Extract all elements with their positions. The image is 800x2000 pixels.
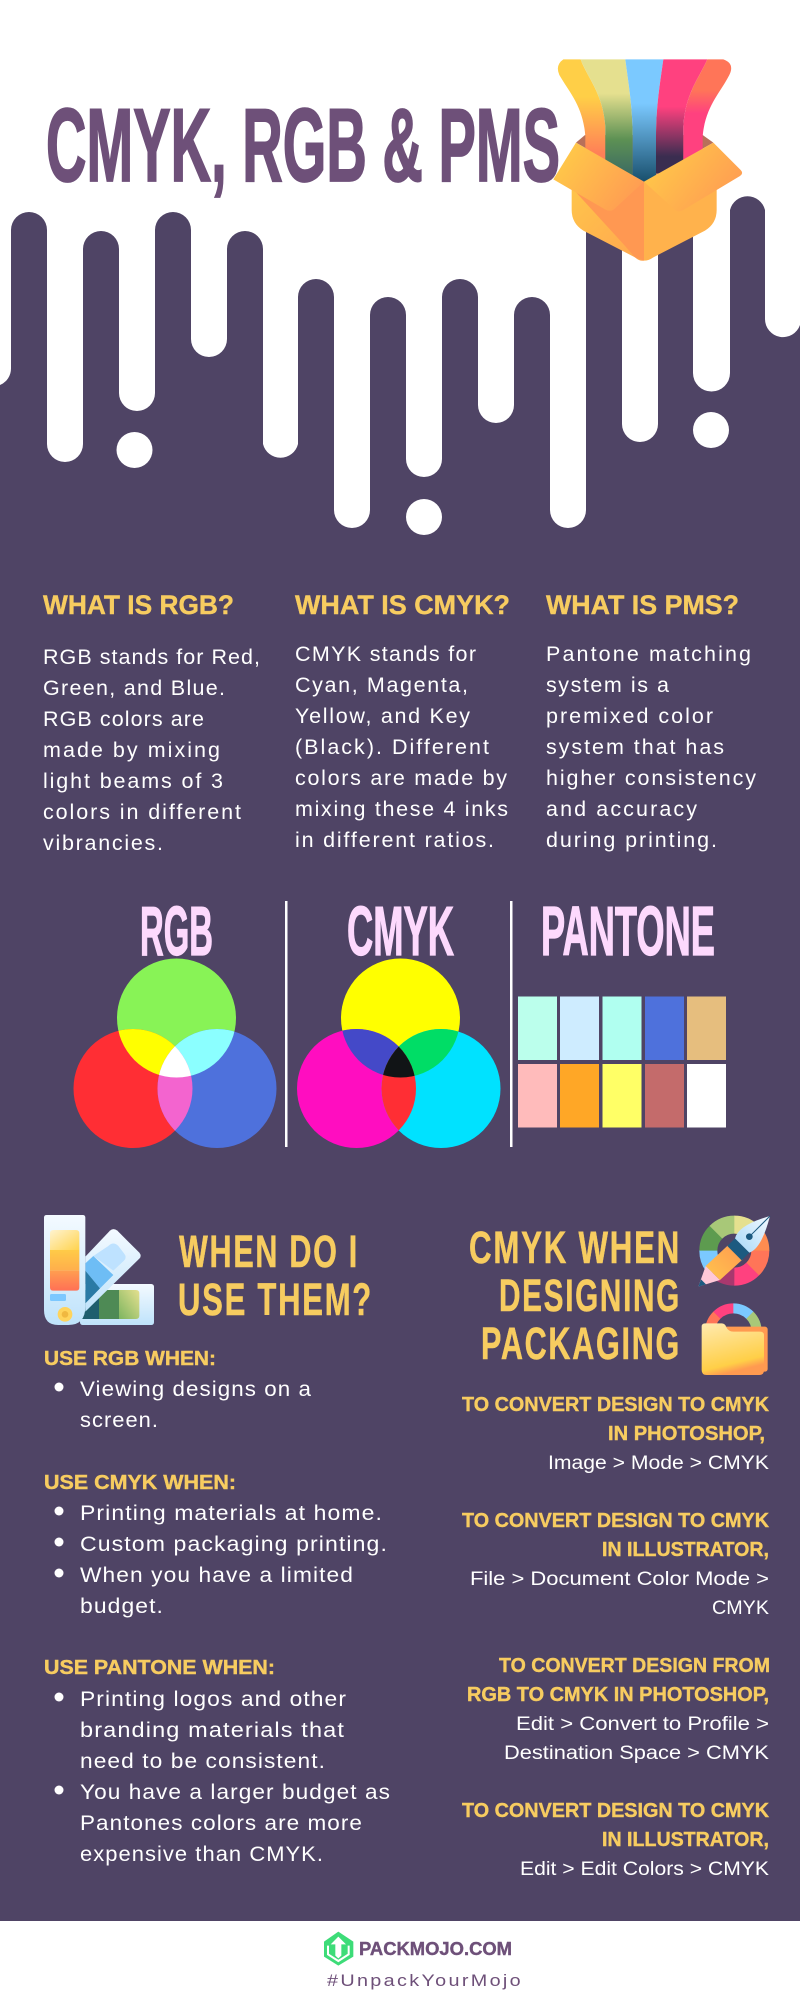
text block: convert from RGB in Photoshop xyxy=(467,1655,770,1764)
text block: convert from RGB in Photoshop: Edit > Convert to Profile > xyxy=(516,1714,769,1735)
heading: when do I use them xyxy=(178,1226,373,1325)
heading: CMYK when designing packaging xyxy=(469,1222,681,1369)
footer hashtag: #UnpackYourMojo xyxy=(327,1971,523,1990)
divider right xyxy=(510,901,512,1147)
text block: convert from RGB in Photoshop: RGB TO CMYK IN PHOTOSHOP, xyxy=(467,1684,769,1706)
icon: open box with colour ribbons xyxy=(553,59,742,261)
text block: convert in Illustrator: IN ILLUSTRATOR, xyxy=(602,1539,769,1561)
icon: folder with colour arc xyxy=(700,1299,768,1375)
panel: RGB colour diagram: RGB xyxy=(140,892,213,970)
bullet list: Pantone uses: Printing logos and other xyxy=(80,1688,347,1711)
panel: what is RGB xyxy=(43,590,260,855)
bullet list: Pantone uses: expensive than CMYK. xyxy=(80,1843,324,1866)
heading: what is RGB: WHAT IS RGB? xyxy=(43,590,234,620)
icon: swatch fan xyxy=(44,1215,154,1325)
text block: CMYK definition: mixing these 4 inks xyxy=(295,797,508,821)
text block: PMS definition: higher consistency xyxy=(546,766,756,790)
text block: convert from RGB in Photoshop: Destination Space > CMYK xyxy=(504,1743,769,1764)
subheading: use RGB when: USE RGB WHEN: xyxy=(44,1347,216,1370)
divider left xyxy=(285,901,288,1147)
panel: what is PMS xyxy=(546,590,756,852)
heading: what is CMYK: WHAT IS CMYK? xyxy=(295,590,510,620)
text block: convert in Photoshop: Image > Mode > CMYK xyxy=(548,1453,769,1474)
text block: PMS definition: system is a xyxy=(546,673,669,697)
bullet list: CMYK uses: Custom packaging printing. xyxy=(80,1533,388,1556)
subheading: use Pantone when: USE PANTONE WHEN: xyxy=(44,1656,275,1679)
text block: convert in Photoshop: IN PHOTOSHOP, xyxy=(608,1423,765,1445)
chart: subtractive CMYK circles xyxy=(297,958,500,1148)
bullet list: CMYK uses: Printing materials at home. xyxy=(80,1502,383,1525)
bullet list: RGB uses xyxy=(54,1378,312,1432)
heading: CMYK when designing packaging: CMYK WHEN xyxy=(469,1222,681,1273)
heading: what is PMS: WHAT IS PMS? xyxy=(546,590,739,620)
heading: CMYK when designing packaging: PACKAGING xyxy=(481,1318,681,1369)
text block: edit colours in Illustrator: TO CONVERT DESIGN TO CMYK xyxy=(462,1800,770,1822)
icon: Packmojo logo xyxy=(324,1932,353,1966)
text block: RGB definition: RGB stands for Red, xyxy=(43,645,260,669)
text block: RGB definition: Green, and Blue. xyxy=(43,676,225,700)
text block: use Pantone when xyxy=(44,1656,391,1866)
text block: convert in Photoshop: TO CONVERT DESIGN TO CMYK xyxy=(462,1394,770,1416)
text block: edit colours in Illustrator: Edit > Edit Colors > CMYK xyxy=(520,1859,769,1880)
text block: PMS definition: system that has xyxy=(546,735,724,759)
text block: CMYK definition: (Black). Different xyxy=(295,735,489,759)
text block: RGB definition: vibrancies. xyxy=(43,831,163,855)
text block: edit colours in Illustrator xyxy=(462,1800,770,1880)
text block: convert in Illustrator xyxy=(462,1510,770,1619)
bullet list: Pantone uses: branding materials that xyxy=(80,1719,345,1742)
text block: convert in Illustrator: TO CONVERT DESIGN TO CMYK xyxy=(462,1510,770,1532)
subheading: use CMYK when: USE CMYK WHEN: xyxy=(44,1471,236,1494)
chart: additive RGB circles xyxy=(74,958,276,1148)
bullet list: RGB uses: screen. xyxy=(80,1409,159,1432)
bullet list: CMYK uses: When you have a limited xyxy=(80,1564,354,1587)
text block: use RGB when xyxy=(44,1347,312,1432)
text block: RGB definition: RGB colors are xyxy=(43,707,204,731)
text block: convert in Illustrator: CMYK xyxy=(712,1598,769,1619)
footer brand name: PACKMOJO.COM xyxy=(359,1939,512,1959)
text block: CMYK definition xyxy=(295,642,508,852)
text block: use CMYK when xyxy=(44,1471,388,1618)
text block: RGB definition: made by mixing xyxy=(43,738,220,762)
text block: CMYK definition: colors are made by xyxy=(295,766,507,790)
panel: what is CMYK xyxy=(295,590,510,852)
text block: RGB definition: colors in different xyxy=(43,800,241,824)
bullet list: CMYK uses xyxy=(54,1502,388,1618)
text block: PMS definition: premixed color xyxy=(546,704,713,728)
text block: convert in Photoshop xyxy=(462,1394,770,1474)
text block: CMYK definition: CMYK stands for xyxy=(295,642,476,666)
heading: when do I use them: WHEN DO I xyxy=(179,1226,359,1277)
bullet list: Pantone uses: need to be consistent. xyxy=(80,1750,326,1773)
text block: RGB definition xyxy=(43,645,260,855)
text block: PMS definition: Pantone matching xyxy=(546,642,751,666)
text block: CMYK definition: in different ratios. xyxy=(295,828,494,852)
text block: RGB definition: light beams of 3 xyxy=(43,769,223,793)
text block: convert in Illustrator: File > Document Color Mode > xyxy=(470,1569,769,1590)
text block: PMS definition xyxy=(546,642,756,852)
text block: PMS definition: during printing. xyxy=(546,828,717,852)
bullet list: RGB uses: Viewing designs on a xyxy=(80,1378,312,1401)
bullet list: CMYK uses: budget. xyxy=(80,1595,164,1618)
bullet list: Pantone uses: Pantones colors are more xyxy=(80,1812,363,1835)
icon: pen over colour wheel xyxy=(698,1214,771,1287)
label: CMYK: CMYK xyxy=(347,892,454,970)
chart: Pantone swatch grid xyxy=(518,996,726,1128)
text block: edit colours in Illustrator: IN ILLUSTRATOR, xyxy=(602,1829,769,1851)
text block: PMS definition: and accuracy xyxy=(546,797,697,821)
panel: RGB colour diagram xyxy=(74,892,276,1148)
panel: CMYK colour diagram xyxy=(297,892,500,1148)
bullet list: Pantone uses: You have a larger budget as xyxy=(80,1781,391,1804)
heading: CMYK when designing packaging: DESIGNING xyxy=(499,1270,681,1321)
heading: when do I use them: USE THEM? xyxy=(178,1274,373,1325)
text block: convert from RGB in Photoshop: TO CONVERT DESIGN FROM xyxy=(499,1655,770,1677)
panel: Pantone swatches xyxy=(518,892,726,1128)
bullet list: Pantone uses xyxy=(54,1688,391,1866)
text block: CMYK definition: Yellow, and Key xyxy=(295,704,470,728)
text block: CMYK definition: Cyan, Magenta, xyxy=(295,673,468,697)
